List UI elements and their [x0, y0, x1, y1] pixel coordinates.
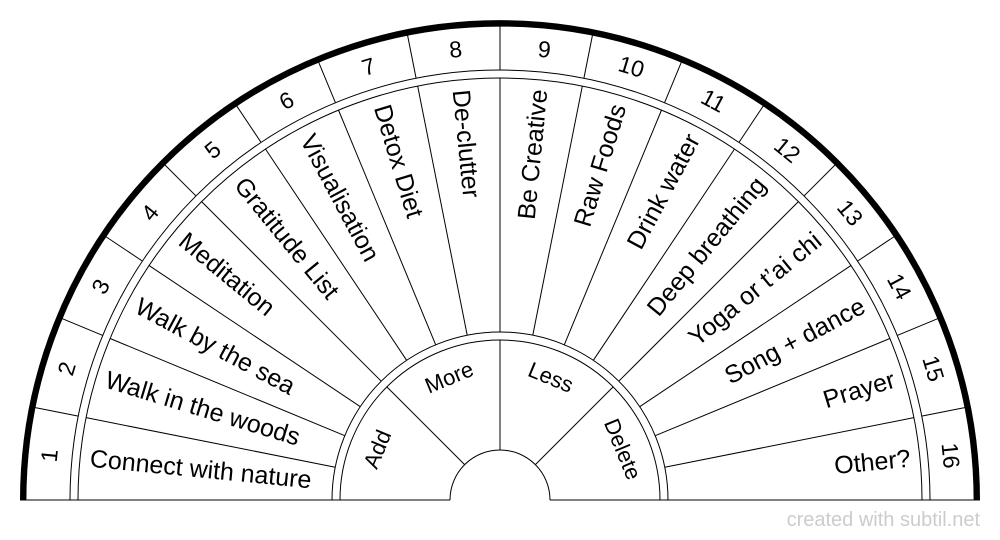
number 14: 14 — [882, 269, 917, 304]
number 2: 2 — [52, 359, 81, 378]
number 5: 5 — [199, 136, 226, 164]
label: Detox Diet: Detox Diet — [368, 101, 429, 221]
label: Walk in the woods: Walk in the woods — [102, 366, 303, 451]
number 9: 9 — [537, 36, 552, 63]
inner ring spokes — [387, 340, 613, 465]
middle ring spokes — [86, 78, 914, 467]
label: De-clutter: De-clutter — [447, 89, 485, 199]
number 12: 12 — [769, 132, 805, 168]
outer ring numbers — [36, 36, 965, 470]
label: Deep breathing: Deep breathing — [642, 172, 772, 322]
number 1: 1 — [36, 448, 63, 463]
number 11: 11 — [697, 83, 730, 118]
chart rings and base — [20, 70, 980, 500]
number 8: 8 — [448, 36, 463, 63]
label: Yoga or t'ai chi: Yoga or t’ai chi — [683, 227, 827, 352]
number 6: 6 — [275, 86, 298, 115]
sector labels — [89, 88, 912, 494]
number 3: 3 — [86, 275, 115, 298]
outer ring spokes — [34, 25, 966, 416]
label: Meditation: Meditation — [173, 227, 280, 322]
label: Visualisation: Visualisation — [294, 130, 385, 266]
number 4: 4 — [136, 199, 164, 226]
label: Drink water: Drink water — [622, 129, 706, 254]
number 16: 16 — [937, 442, 965, 470]
number 13: 13 — [832, 195, 868, 231]
number 7: 7 — [359, 52, 378, 81]
inner label: Add: Add — [358, 426, 396, 472]
label: Prayer: Prayer — [820, 366, 899, 414]
label: Song + dance: Song + dance — [720, 292, 870, 390]
label: Be Creative: Be Creative — [513, 88, 553, 221]
label: Walk by the sea: Walk by the sea — [131, 293, 300, 401]
watermark: created with subtil.net — [787, 509, 980, 531]
inner label: Less: Less — [525, 357, 577, 398]
number 10: 10 — [615, 50, 648, 83]
label: Raw Foods: Raw Foods — [569, 101, 632, 230]
label: Gratitude List: Gratitude List — [229, 172, 345, 305]
number 15: 15 — [917, 352, 950, 385]
label: Connect with nature: Connect with nature — [89, 445, 313, 494]
inner label: Delete: Delete — [599, 415, 646, 483]
inner sector labels — [358, 356, 646, 483]
inner label: More: More — [421, 356, 477, 398]
label: Other?: Other? — [833, 445, 912, 480]
